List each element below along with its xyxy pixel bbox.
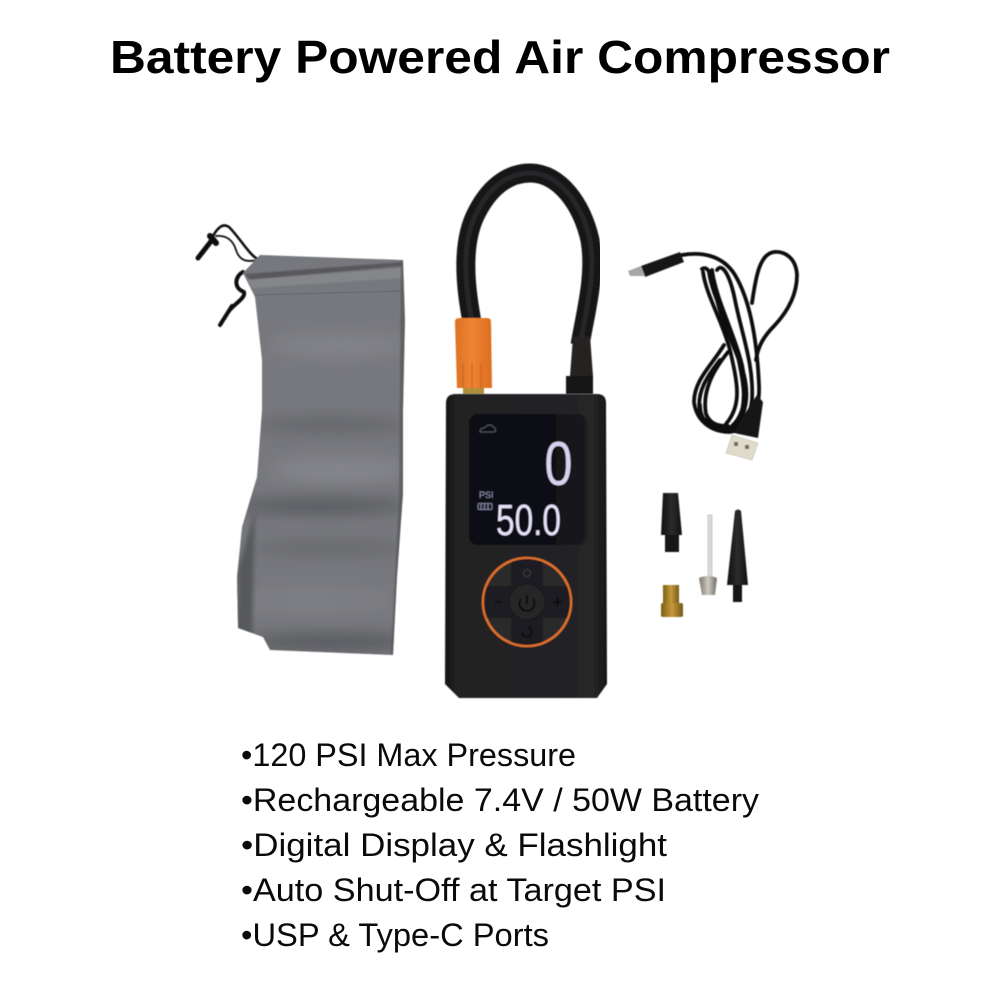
control ring (479, 555, 575, 650)
hose strain relief (570, 336, 593, 376)
title: Battery Powered Air Compressor (110, 31, 890, 83)
air hose (455, 173, 593, 394)
feature list (241, 737, 759, 953)
PSI label: PSI (479, 490, 494, 500)
feature: pressure: •120 PSI Max Pressure (241, 737, 576, 773)
braided hose (466, 173, 592, 345)
car icon (480, 425, 496, 432)
cone nozzle (727, 510, 748, 602)
feature: display: •Digital Display & Flashlight (241, 827, 667, 863)
short nozzle (661, 493, 682, 552)
battery icon (478, 504, 492, 510)
brass fitting (463, 388, 484, 394)
display screen (469, 414, 587, 545)
cycle icon (522, 627, 532, 637)
cable coils (682, 252, 797, 432)
power icon (520, 595, 534, 611)
compressor body (445, 394, 607, 698)
feature: battery: •Rechargeable 7.4V / 50W Battery (241, 782, 759, 818)
USB-C tip (628, 266, 645, 276)
USB-A overmold (734, 395, 763, 438)
charging cable (628, 252, 797, 460)
storage bag (198, 225, 420, 655)
minus icon (495, 601, 501, 603)
bag drawstring (198, 225, 258, 325)
target pressure reading: 50.0 (496, 496, 561, 545)
orange collar (455, 318, 492, 388)
hose knurled base (566, 376, 593, 394)
tip adapters (661, 493, 748, 617)
directional pad (484, 558, 570, 646)
USB-C overmold (641, 252, 684, 277)
bag fabric (237, 255, 405, 655)
feature: auto shut-off: •Auto Shut-Off at Target PSI (241, 872, 666, 908)
current pressure reading: 0 (544, 430, 572, 499)
power button (509, 584, 545, 620)
brass valve adapter (661, 585, 683, 617)
feature: ports: •USP & Type-C Ports (241, 917, 549, 953)
plus icon (553, 598, 562, 606)
needle adapter (699, 515, 717, 595)
light icon (524, 570, 530, 576)
USB-A plug (726, 435, 758, 460)
